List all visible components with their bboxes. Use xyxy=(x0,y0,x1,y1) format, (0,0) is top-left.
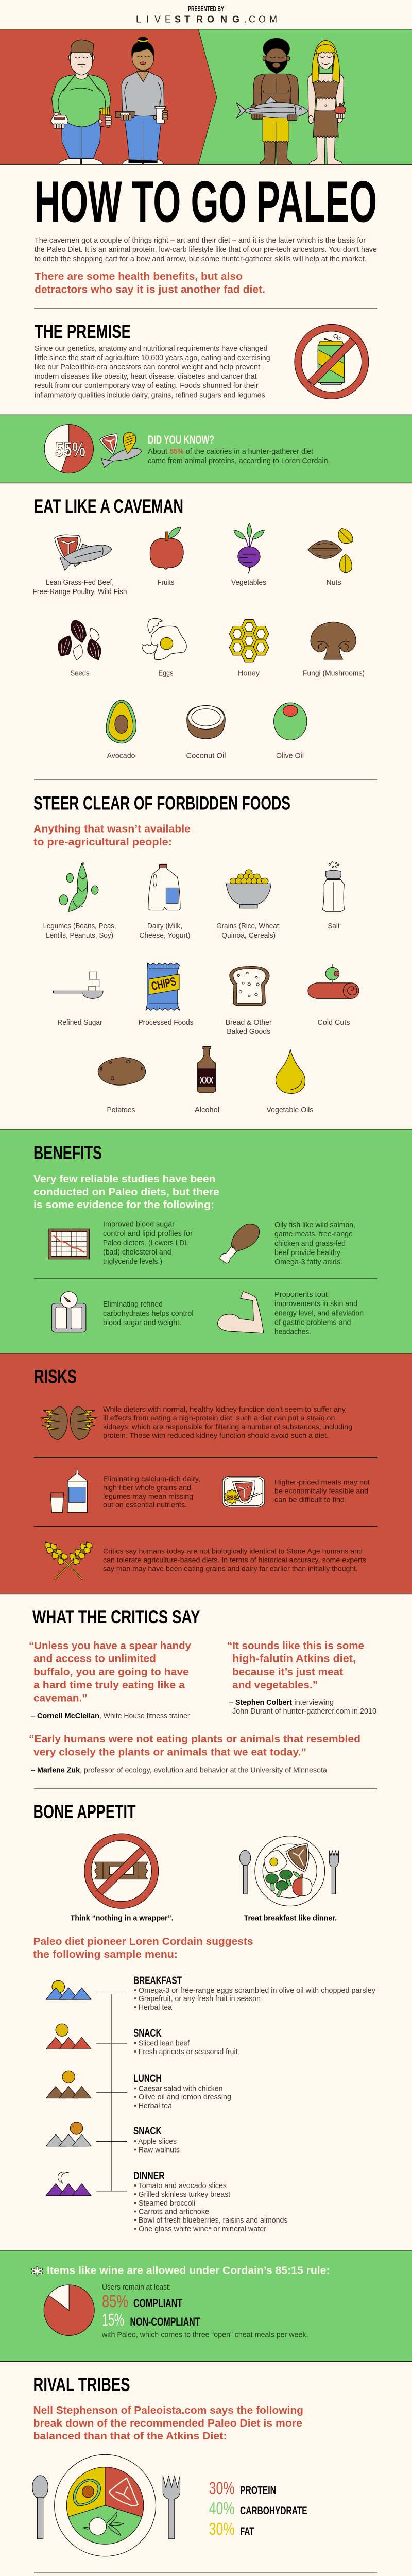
menu: dinner: • One glass white wine* or mineral water xyxy=(134,2225,266,2233)
risk text: critics: Critics say humans today are not biologically identical to Stone Age humans and xyxy=(103,1547,363,1555)
icon: coconut xyxy=(187,705,225,739)
quote: marlene zuk xyxy=(29,1734,360,1774)
logo: livestrong: .COM xyxy=(244,14,277,25)
legend: macronutrients: 40% xyxy=(209,2499,235,2518)
figure: woman with snack bar and soda xyxy=(115,37,168,164)
subheading: Anything that wasn’t available xyxy=(33,823,191,835)
text: did you know xyxy=(148,433,330,465)
labels: forbidden row two: Processed Foods xyxy=(138,1019,194,1027)
text: did you know: DID YOU KNOW? xyxy=(148,433,214,446)
legend: macronutrients xyxy=(209,2479,307,2538)
intro text: to ditch the shopping cart for a bow and arrow, but some hunter-gatherer skills will help at the market. xyxy=(35,255,367,263)
icon: breakfast plate xyxy=(239,1836,339,1906)
labels: row one xyxy=(33,579,341,596)
menu: breakfast: • Omega-3 or free-range eggs scrambled in olive oil with chopped parsley xyxy=(134,1987,376,1995)
icon: avocado xyxy=(106,700,136,743)
icon: falling chart xyxy=(48,1229,89,1259)
benefit text: blood sugar: (bad) cholesterol and xyxy=(103,1248,171,1257)
menu: first snack: SNACK xyxy=(133,2027,162,2039)
figure: caveman with fish xyxy=(236,38,308,165)
menu: breakfast: • Grapefruit, or any fresh fruit in season xyxy=(134,1995,261,2003)
benefit text: refined carbs xyxy=(103,1300,194,1327)
icon: milk carton and glass xyxy=(50,1470,87,1512)
risk text: critics: can tolerate agriculture-based diets. In terms of historical accuracy, some experts xyxy=(103,1556,366,1564)
benefit text: oily fish: game meats, free-range xyxy=(274,1230,353,1239)
icon: drumstick xyxy=(220,1224,260,1263)
icon: cold cuts xyxy=(308,965,359,998)
pie chart: 55 percent xyxy=(44,425,93,473)
heading: risks: RISKS xyxy=(34,1366,77,1387)
legend: macronutrients: PROTEIN xyxy=(240,2484,276,2497)
benefit text: blood sugar: Improved blood sugar xyxy=(103,1221,175,1229)
subheading: to pre-agricultural people: xyxy=(33,837,172,848)
subheading: rival tribes: balanced than that of the Atkins Diet: xyxy=(33,2431,227,2442)
compliance figures: 15% xyxy=(102,2310,124,2329)
quote: stephen colbert xyxy=(227,1640,376,1716)
legend: macronutrients: CARBOHYDRATE xyxy=(240,2504,307,2517)
header: presented by: PRESENTED BY xyxy=(188,5,224,13)
quote: stephen colbert: John Durant of hunter-gatherer.com in 2010 xyxy=(232,1707,376,1716)
icon: no wrapper xyxy=(84,1834,159,1908)
labels: row two: Eggs xyxy=(159,670,173,678)
subheading: rival tribes xyxy=(33,2405,303,2442)
risk text: missing nutrients xyxy=(103,1475,200,1509)
subheading: rival tribes: break down of the recommended Paleo Diet is more xyxy=(33,2418,302,2429)
benefit text: skin and energy: Proponents tout xyxy=(274,1291,328,1299)
compliance figures: 85% xyxy=(102,2292,128,2311)
labels: forbidden row two: Cold Cuts xyxy=(317,1019,350,1027)
labels: forbidden row one: Lentils, Peanuts, Soy) xyxy=(46,931,113,940)
icon: milk jug xyxy=(148,864,180,910)
header: presented by xyxy=(136,5,277,25)
benefit text: blood sugar xyxy=(103,1221,193,1266)
risk text: missing nutrients: high fiber whole grains and xyxy=(103,1483,191,1492)
menu: first snack xyxy=(133,2027,238,2056)
icon: salt shaker xyxy=(323,862,344,912)
heading: benefits: BENEFITS xyxy=(33,1142,102,1163)
icon: legumes xyxy=(59,863,98,911)
menu: first snack: • Sliced lean beef xyxy=(134,2040,190,2048)
risk text: kidneys: kidneys, which are responsible for filtering a number of substances, including xyxy=(103,1422,352,1431)
logo: livestrong: LIVE xyxy=(136,14,171,25)
panel: 85:15 rule xyxy=(0,2250,412,2362)
timeline xyxy=(96,1994,127,2192)
menu: second snack: • Apple slices xyxy=(134,2138,177,2146)
text: did you know: 55% xyxy=(170,448,184,456)
intro subheading xyxy=(35,271,265,296)
icon: refined sugar xyxy=(54,972,103,998)
compliance figures: COMPLIANT xyxy=(133,2297,182,2310)
risk text: missing nutrients: Eliminating calcium-rich dairy, xyxy=(103,1475,200,1483)
quote: stephen colbert: and vegetables.” xyxy=(232,1680,318,1691)
labels: forbidden row three xyxy=(107,1106,313,1114)
pie chart: 85 percent xyxy=(44,2285,94,2335)
legend: macronutrients: 30% xyxy=(209,2479,235,2498)
compliance figures xyxy=(101,2283,308,2340)
icon: honeycomb xyxy=(229,619,269,662)
benefit text: skin and energy xyxy=(274,1291,364,1336)
premise text: inflammatory qualities include dairy, grains, refined sugars and legumes. xyxy=(35,391,267,399)
quote: stephen colbert: interviewing xyxy=(294,1699,334,1707)
icon: bottle: XXX xyxy=(200,1076,213,1086)
menu: dinner: • Carrots and artichoke xyxy=(134,2208,209,2216)
icon: bottle xyxy=(198,1046,215,1093)
menu: breakfast: BREAKFAST xyxy=(133,1974,182,1987)
intro text: The cavemen got a couple of things right – art and their diet – and it is the latter which is the basis for xyxy=(35,236,366,245)
risk text: critics: say man may have been eating grains and dairy far earlier than initially thought. xyxy=(103,1564,358,1572)
premise text: modern diseases like obesity, heart disease, diabetes and cancer that xyxy=(35,372,257,381)
section: eat like a caveman xyxy=(33,496,365,760)
icon: chips bag xyxy=(146,963,180,1010)
benefit text: oily fish: chicken and grass-fed xyxy=(274,1240,346,1248)
compliance figures: NON-COMPLIANT xyxy=(130,2315,200,2328)
intro subheading: detractors who say it is just another fad diet. xyxy=(35,284,265,296)
benefit text: blood sugar: triglyceride levels.) xyxy=(103,1258,162,1266)
premise text: Since our genetics, anatomy and nutritional requirements have changed xyxy=(35,345,268,353)
section: the premise xyxy=(35,321,369,399)
quote: marlene zuk: , professor of ecology, evolution and behavior at the University of Minnesota xyxy=(80,1766,328,1774)
labels: row one: Nuts xyxy=(327,579,341,587)
labels: forbidden row one: Grains (Rice, Wheat, xyxy=(216,922,281,930)
quote: marlene zuk: – xyxy=(31,1766,36,1774)
icon: bread xyxy=(230,966,269,1006)
labels: row three: Olive Oil xyxy=(276,752,304,760)
icon: flexed arm xyxy=(217,1292,264,1333)
figure: overweight man xyxy=(50,40,111,164)
menu: lunch: LUNCH xyxy=(133,2072,162,2084)
premise text xyxy=(35,345,270,399)
icon: seeds xyxy=(58,620,101,660)
text: did you know: About xyxy=(148,448,167,456)
labels: row two: Honey xyxy=(238,670,260,678)
icon: priced steak xyxy=(222,1476,265,1507)
text: did you know: of the calories in a hunter-gatherer diet xyxy=(186,448,313,456)
labels: forbidden row two xyxy=(58,1019,350,1036)
risk text: critics xyxy=(103,1547,366,1572)
risk text: missing nutrients: legumes may mean missing xyxy=(103,1492,193,1500)
risk text: kidneys: While dieters with normal, healthy kidney function don’t seem to suffer any xyxy=(103,1405,346,1413)
panel: benefits xyxy=(0,1129,412,1353)
heading: rival tribes: RIVAL TRIBES xyxy=(33,2374,130,2395)
pie chart: 55 percent: 55% xyxy=(55,437,85,461)
labels: row three: Coconut Oil xyxy=(186,752,226,760)
panel: risks xyxy=(0,1353,412,1594)
compliance figures: with Paleo, which comes to three “open” cheat meals per week. xyxy=(101,2331,308,2340)
menu: dinner: • Grilled skinless turkey breast xyxy=(134,2191,230,2199)
labels: row one: Lean Grass-Fed Beef, xyxy=(46,579,114,587)
icon: grain bowl xyxy=(226,870,271,908)
benefit text: refined carbs: blood sugar and weight. xyxy=(103,1319,181,1327)
icon: eggs xyxy=(142,618,186,660)
menu: dinner: DINNER xyxy=(133,2170,165,2182)
quote: stephen colbert: “It sounds like this is some xyxy=(227,1640,364,1652)
benefit text: skin and energy: energy level, and alleviation xyxy=(274,1310,364,1318)
menu: dinner: • Bowl of fresh blueberries, raisins and almonds xyxy=(134,2216,287,2225)
icon: scale xyxy=(52,1292,86,1332)
quote: cornell mcclellan: “Unless you have a spear handy xyxy=(29,1640,192,1652)
risk text: higher priced meats: can be difficult to find. xyxy=(274,1495,347,1503)
risk text: kidneys xyxy=(103,1405,352,1439)
quote: stephen colbert: high-falutin Atkins diet, xyxy=(232,1653,356,1665)
text: did you know: came from animal proteins, according to Loren Cordain. xyxy=(148,457,330,465)
labels: forbidden row one: Quinoa, Cereals) xyxy=(221,931,276,940)
icon: mushroom xyxy=(311,622,356,659)
quote: cornell mcclellan: and access to unlimited xyxy=(33,1653,156,1665)
benefit text: skin and energy: of gastric problems and xyxy=(274,1319,351,1327)
labels: forbidden row one: Cheese, Yogurt) xyxy=(139,931,191,940)
section: what the critics say xyxy=(29,1606,376,1774)
labels: row one: Free-Range Poultry, Wild Fish xyxy=(33,588,127,596)
icon: chips bag: CHIPS xyxy=(150,974,177,993)
compliance figures: Users remain at least: xyxy=(102,2283,171,2292)
quote: marlene zuk: Marlene Zuk xyxy=(37,1766,80,1774)
icon: olive xyxy=(274,703,307,740)
heading: the premise: THE PREMISE xyxy=(35,321,131,342)
menu: second snack: SNACK xyxy=(133,2125,162,2137)
heading: eat like a caveman: EAT LIKE A CAVEMAN xyxy=(34,496,183,517)
benefit text: refined carbs: Eliminating refined xyxy=(103,1300,163,1309)
quote: cornell mcclellan: caveman.” xyxy=(33,1693,88,1704)
intro text: the Paleo Diet. It is an animal protein, low-carb lifestyle like that of our pre-tech ancestors. You don’t have xyxy=(35,246,377,254)
section: forbidden foods xyxy=(33,793,359,1114)
labels: forbidden row two: Bread & Other xyxy=(226,1019,272,1027)
quote: cornell mcclellan: – xyxy=(31,1712,36,1720)
icon: potato xyxy=(98,1058,146,1085)
menu: second snack: • Raw walnuts xyxy=(134,2146,180,2154)
icon: oil drop xyxy=(276,1049,305,1093)
benefit text: oily fish: Omega-3 fatty acids. xyxy=(274,1258,342,1266)
icon: no soda can xyxy=(295,324,369,399)
intro subheading: There are some health benefits, but also xyxy=(35,271,243,282)
labels: row two: Seeds xyxy=(70,670,90,678)
quote: cornell mcclellan: , White House fitness trainer xyxy=(99,1712,190,1720)
menu: lunch xyxy=(133,2072,231,2110)
heading: bone appetit: BONE APPETIT xyxy=(33,1801,136,1822)
section: rival tribes xyxy=(32,2374,307,2556)
quote: stephen colbert: – xyxy=(229,1699,234,1707)
section: bone appetit xyxy=(33,1801,376,2233)
premise text: like our Paleolithic-era ancestors can control weight and help prevent xyxy=(35,363,260,371)
quote: cornell mcclellan: Cornell McClellan xyxy=(37,1712,99,1720)
icon: beet xyxy=(234,523,264,573)
risk text: missing nutrients: out on essential nutrients. xyxy=(103,1500,187,1509)
heading: steer clear: STEER CLEAR OF FORBIDDEN FOODS xyxy=(33,793,290,814)
menu: dinner: • Tomato and avocado slices xyxy=(134,2182,227,2190)
labels: forbidden row three: Potatoes xyxy=(107,1106,135,1114)
intro text xyxy=(35,236,377,263)
benefit text: oily fish xyxy=(274,1221,355,1266)
logo: livestrong: STRONG xyxy=(175,14,239,25)
legend: macronutrients: 30% xyxy=(209,2519,235,2538)
menu: dinner: • Steamed broccoli xyxy=(134,2199,195,2208)
labels: forbidden row two: Refined Sugar xyxy=(58,1019,102,1027)
menu: first snack: • Fresh apricots or seasonal fruit xyxy=(134,2048,238,2056)
logo: livestrong xyxy=(136,14,277,25)
labels: row three xyxy=(107,752,304,760)
panel: did you know xyxy=(0,414,412,483)
risk text: kidneys: protein. Those with reduced kidney function should avoid such a diet. xyxy=(103,1431,329,1439)
icon: asterisk xyxy=(32,2267,42,2275)
subheading xyxy=(33,823,191,848)
labels: row one: Vegetables xyxy=(231,579,266,587)
icon: priced steak: $$$ xyxy=(227,1494,237,1501)
menu: lunch: • Herbal tea xyxy=(134,2102,173,2110)
benefits intro: Very few reliable studies have been xyxy=(33,1174,216,1185)
labels: forbidden row one xyxy=(43,922,340,940)
labels: forbidden row one: Dairy (Milk, xyxy=(147,922,182,930)
labels: forbidden row one: Salt xyxy=(328,922,340,930)
icon: crossed wheat xyxy=(45,1542,92,1579)
risk text: higher priced meats: Higher-priced meats may not xyxy=(274,1478,370,1486)
subheading: rival tribes: Nell Stephenson of Paleoista.com says the following xyxy=(33,2405,303,2416)
chart: macronutrient plate xyxy=(32,2454,180,2556)
icon: steak and fish xyxy=(55,535,112,570)
heading: critics: WHAT THE CRITICS SAY xyxy=(32,1606,200,1628)
quote: cornell mcclellan xyxy=(29,1640,192,1720)
benefit text: blood sugar: control and lipid profiles for xyxy=(103,1230,193,1238)
quote: cornell mcclellan: a hard time truly eating like a xyxy=(33,1680,185,1691)
captions: wrapper and breakfast: Treat breakfast like dinner. xyxy=(244,1913,337,1923)
labels: forbidden row three: Alcohol xyxy=(195,1106,219,1114)
quote: cornell mcclellan: buffalo, you are going to have xyxy=(33,1667,189,1678)
benefit text: oily fish: Oily fish like wild salmon, xyxy=(274,1221,355,1229)
menu: lunch: • Caesar salad with chicken xyxy=(134,2084,222,2093)
subheading: sample menu xyxy=(33,1936,253,1960)
premise text: little since the start of agriculture 10,000 years ago, eating and exercising xyxy=(35,354,270,362)
subheading: sample menu: the following sample menu: xyxy=(33,1949,178,1960)
captions: wrapper and breakfast xyxy=(71,1913,337,1923)
labels: forbidden row two: Baked Goods xyxy=(227,1028,270,1036)
menu: breakfast xyxy=(133,1974,376,2012)
labels: row two xyxy=(70,670,365,678)
subheading: sample menu: Paleo diet pioneer Loren Cordain suggests xyxy=(33,1936,253,1947)
quote: stephen colbert: because it’s just meat xyxy=(232,1667,343,1678)
icon: nuts xyxy=(308,528,353,573)
quote: marlene zuk: very closely the plants or animals that we eat today.” xyxy=(33,1747,306,1758)
hero illustration band xyxy=(0,29,412,165)
benefit text: blood sugar: Paleo dieters. (Lowers LDL xyxy=(103,1239,188,1247)
figure: cavewoman with apple xyxy=(308,41,346,165)
labels: forbidden row one: Legumes (Beans, Peas, xyxy=(43,922,116,930)
icon: steak, fish and leaf xyxy=(99,432,141,467)
menu: dinner xyxy=(133,2170,287,2233)
menu: second snack xyxy=(133,2125,180,2154)
labels: row two: Fungi (Mushrooms) xyxy=(303,670,365,678)
premise text: result from our contemporary way of eating. Foods shunned for their xyxy=(35,382,259,390)
benefits intro: is some evidence for the following: xyxy=(33,1199,214,1211)
menu: lunch: • Olive oil and lemon dressing xyxy=(134,2093,231,2102)
captions: wrapper and breakfast: Think “nothing in a wrapper”. xyxy=(71,1913,174,1923)
legend: macronutrients: FAT xyxy=(240,2525,254,2537)
benefits intro: conducted on Paleo diets, but there xyxy=(33,1187,219,1198)
icon: apple xyxy=(150,527,183,569)
benefit text: oily fish: beef provide healthy xyxy=(274,1249,341,1257)
labels: row three: Avocado xyxy=(107,752,135,760)
quote: marlene zuk: “Early humans were not eating plants or animals that resembled xyxy=(29,1734,360,1745)
heading: 85:15 rule: Items like wine are allowed under Cordain’s 85:15 rule: xyxy=(47,2265,330,2276)
benefit text: skin and energy: headaches. xyxy=(274,1328,311,1336)
risk text: kidneys: ill effects from eating a high-protein diet, such a diet can put a strain on xyxy=(103,1414,335,1422)
labels: row one: Fruits xyxy=(158,579,174,587)
labels: forbidden row three: Vegetable Oils xyxy=(267,1106,313,1114)
benefit text: refined carbs: carbohydrates helps control xyxy=(103,1310,194,1318)
benefit text: skin and energy: improvements in skin and xyxy=(274,1300,357,1308)
icon: kidneys xyxy=(41,1406,97,1439)
icons: time of day mountains xyxy=(46,1980,91,2196)
benefits intro xyxy=(33,1174,219,1211)
risk text: higher priced meats: be economically feasible and xyxy=(274,1487,368,1495)
quote: stephen colbert: Stephen Colbert xyxy=(235,1699,292,1707)
risk text: higher priced meats xyxy=(274,1478,370,1503)
menu: breakfast: • Herbal tea xyxy=(134,2004,173,2012)
